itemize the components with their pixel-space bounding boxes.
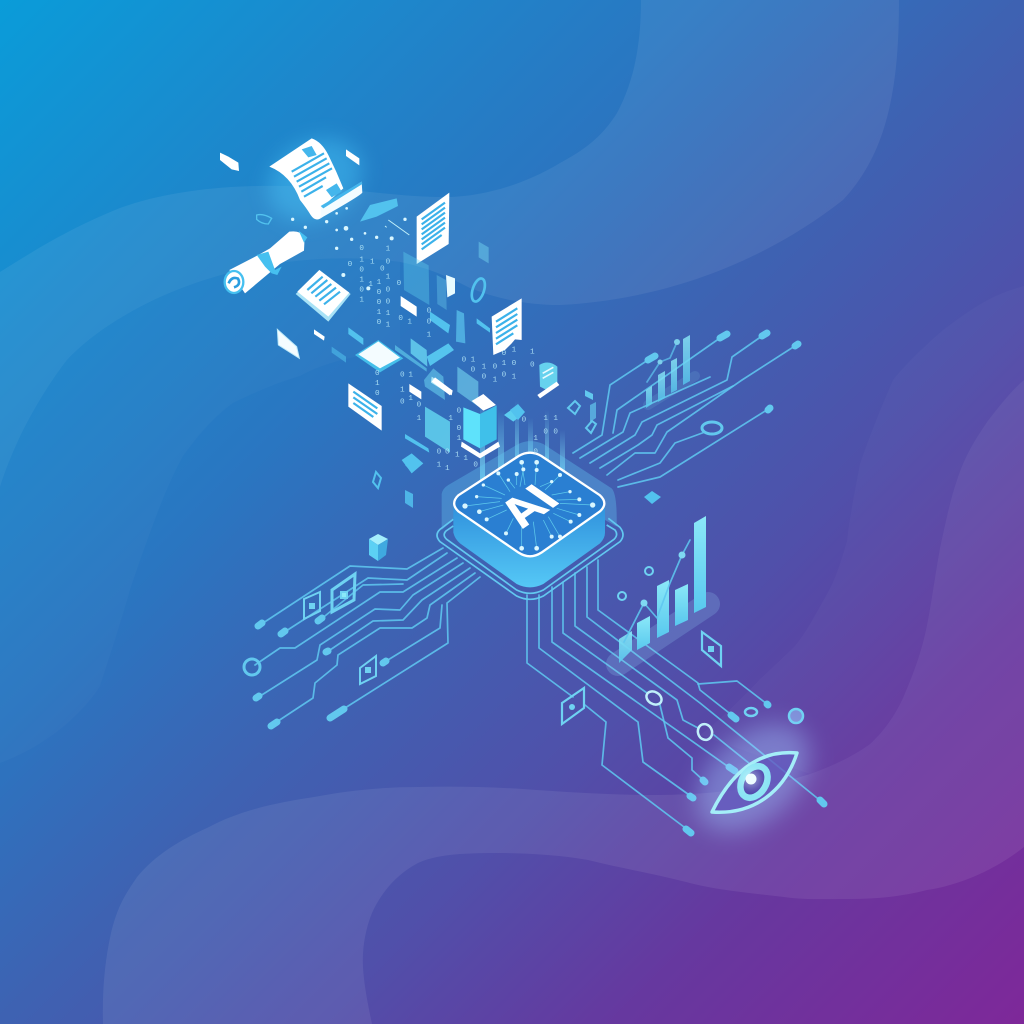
isometric cube (369, 534, 388, 561)
circuit traces: north-east (573, 333, 798, 487)
falling fragments near chip (369, 390, 661, 561)
scroll (225, 231, 307, 293)
plate (355, 340, 403, 372)
page: torn (492, 298, 522, 355)
curled document (269, 138, 362, 219)
ring glyph (469, 277, 487, 303)
binary digit rain: 0101001 (462, 357, 498, 385)
circuit traces: south-east (527, 560, 824, 833)
page: lower (348, 383, 382, 431)
binary digit rain: 0101001 (375, 308, 432, 403)
light rays above chip (480, 395, 565, 480)
chip body (453, 503, 605, 587)
chip top face (454, 453, 604, 556)
binary digit rain: 011010 (398, 315, 413, 406)
AI chip (437, 441, 623, 599)
binary digit rain: 10101010 (530, 348, 558, 456)
specks (291, 207, 407, 290)
chip base rings (437, 518, 623, 599)
diamond chip marker east (702, 632, 721, 666)
small chip squares (304, 574, 376, 684)
chip halo (442, 441, 617, 530)
glow behind document (253, 122, 377, 238)
diamond chip marker south (562, 688, 584, 724)
binary digit rain: 1010011 (386, 246, 391, 330)
binary digit rain: 0100 (348, 258, 402, 288)
circuit traces: south-west (244, 548, 480, 726)
page: upper (417, 193, 449, 264)
floating documents and data (220, 122, 559, 473)
binary digit rain: 01010101 (417, 402, 462, 470)
cyan data blocks (355, 242, 559, 458)
lower bar chart (618, 516, 708, 664)
binary digit rain (348, 245, 558, 473)
AI label: AI (488, 478, 570, 535)
small diagonal ticks (385, 220, 409, 235)
binary digit rain: 01101 (445, 448, 478, 473)
binary digit rain: 010101 (359, 245, 364, 305)
binary digit rain: 110010 (368, 279, 382, 327)
eye icon (676, 703, 830, 853)
binary digit rain: 0101010 (502, 347, 527, 425)
chip circuitry (465, 462, 593, 548)
cyan flakes (257, 198, 490, 473)
folder (277, 329, 299, 358)
small flakes (220, 149, 453, 399)
upper bar chart (646, 335, 695, 408)
book (296, 270, 351, 322)
